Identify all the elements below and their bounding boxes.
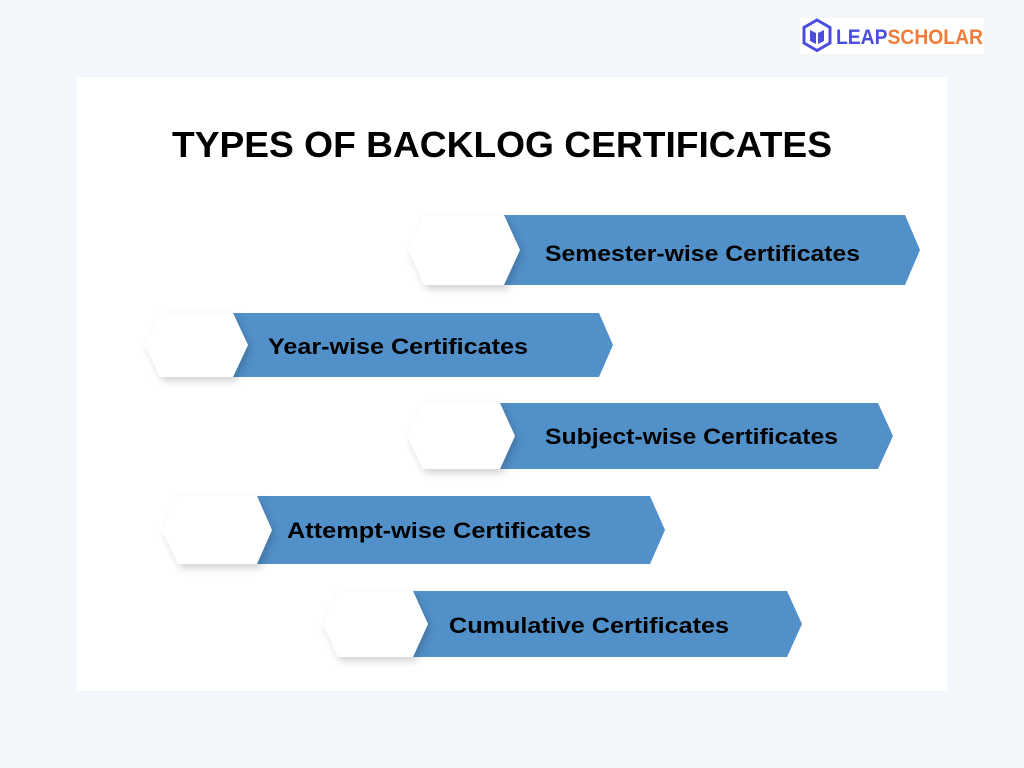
banner: semester-wise: [408, 215, 920, 285]
banner: cumulative: Cumulative Certificates: [449, 613, 729, 638]
banner: subject-wise: [407, 403, 893, 469]
banner: year-wise: [145, 313, 613, 377]
title: TYPES OF BACKLOG CERTIFICATES: [172, 124, 832, 165]
banner: attempt-wise: [162, 496, 665, 564]
panel: white card: [77, 77, 947, 691]
logo: leapscholar: [800, 18, 984, 54]
icon: logo cube: [804, 20, 830, 50]
banner: semester-wise: Semester-wise Certificates: [545, 241, 860, 266]
banner: cumulative: [323, 591, 802, 657]
banner: attempt-wise: Attempt-wise Certificates: [287, 518, 591, 543]
banner: year-wise: Year-wise Certificates: [268, 334, 528, 359]
banner: subject-wise: Subject-wise Certificates: [545, 424, 838, 449]
logo: leapscholar: LEAPSCHOLAR: [836, 26, 983, 49]
